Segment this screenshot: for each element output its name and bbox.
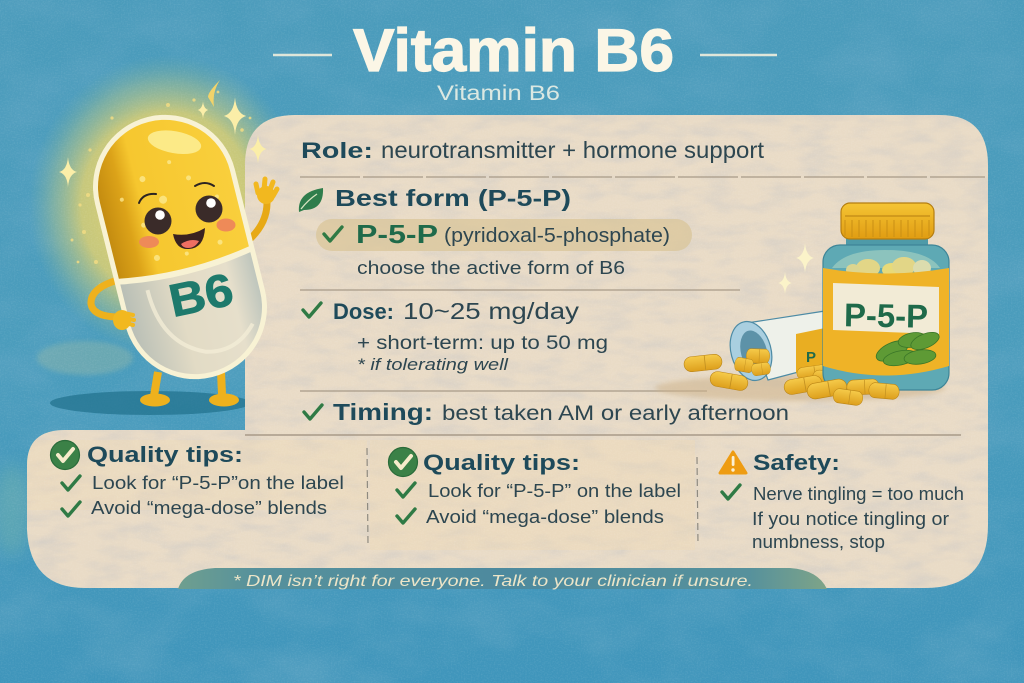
capsules in front of bottle <box>783 374 900 406</box>
footer note banner: * DIM isn’t right for everyone. Talk to your clinician if unsure. <box>233 573 753 590</box>
illustration: P-5-P bottle <box>823 203 949 390</box>
title: Vitamin B6 <box>437 82 560 105</box>
ground shadow under mascot <box>50 391 250 415</box>
panel: safety: Nerve tingling = too much <box>753 483 964 504</box>
row: best form: (pyridoxal-5-phosphate) <box>444 225 670 247</box>
mascot waving arm <box>251 179 277 238</box>
mascot hand on hip <box>113 310 134 330</box>
mascot face <box>139 183 236 249</box>
row: best form <box>299 185 692 278</box>
row: dose: * if tolerating well <box>357 355 509 374</box>
row: role: Role: <box>301 138 373 163</box>
row: dose: Dose: <box>333 299 394 324</box>
sparkle dust around mascot <box>70 91 251 286</box>
row: best form: choose the active form of B6 <box>357 257 625 278</box>
title: Vitamin B6 <box>353 17 674 84</box>
mascot: B6 capsule character <box>87 114 280 406</box>
row: timing: best taken AM or early afternoon <box>442 401 789 425</box>
mascot legs and feet <box>140 372 239 406</box>
panel: quality tips 1: Quality tips: <box>87 442 243 467</box>
mascot capsule body <box>93 114 267 380</box>
row: timing <box>304 399 789 425</box>
panel: quality tips 2: Look for “P-5-P” on the label <box>428 481 681 501</box>
illustration: fallen bottle and capsules <box>655 311 945 401</box>
panel: quality tips 2: Avoid “mega-dose” blends <box>426 507 664 527</box>
panel: safety: Safety: <box>753 450 840 475</box>
row: best form: Best form (P-5-P) <box>335 185 571 211</box>
panel: safety <box>720 450 964 552</box>
row: dose: 10~25 mg/day <box>403 298 580 324</box>
row: dose: + short-term: up to 50 mg <box>357 332 608 354</box>
panel: safety: numbness, stop <box>752 531 885 552</box>
illustration: P-5-P bottle: P-5-P <box>844 296 928 335</box>
mascot B6 label: B6 <box>164 263 238 327</box>
illustration: fallen bottle and capsules: P <box>806 349 816 366</box>
icon: warning triangle <box>720 452 746 473</box>
sparkles near mascot <box>59 80 267 187</box>
sparkles near bottle <box>778 243 814 294</box>
bottle cap <box>841 203 934 239</box>
icon: leaf <box>299 188 323 212</box>
panel: quality tips 1: Avoid “mega-dose” blends <box>91 498 327 518</box>
panel: quality tips 1 <box>50 440 344 518</box>
row: timing: Timing: <box>333 399 433 425</box>
mascot arm on hip <box>91 280 118 317</box>
row: best form: P-5-P <box>356 219 438 249</box>
panel: quality tips 2 <box>388 448 681 527</box>
panel: safety: If you notice tingling or <box>752 508 949 529</box>
panel: quality tips 1: Look for “P-5-P”on the label <box>92 473 344 493</box>
footer note banner <box>178 568 827 590</box>
panel: quality tips 2: Quality tips: <box>423 450 580 475</box>
row: role: neurotransmitter + hormone support <box>381 137 765 163</box>
row: dose <box>303 298 608 374</box>
icon: leaves on label <box>873 329 942 368</box>
title <box>273 17 777 105</box>
panel: main parchment card <box>27 115 988 588</box>
